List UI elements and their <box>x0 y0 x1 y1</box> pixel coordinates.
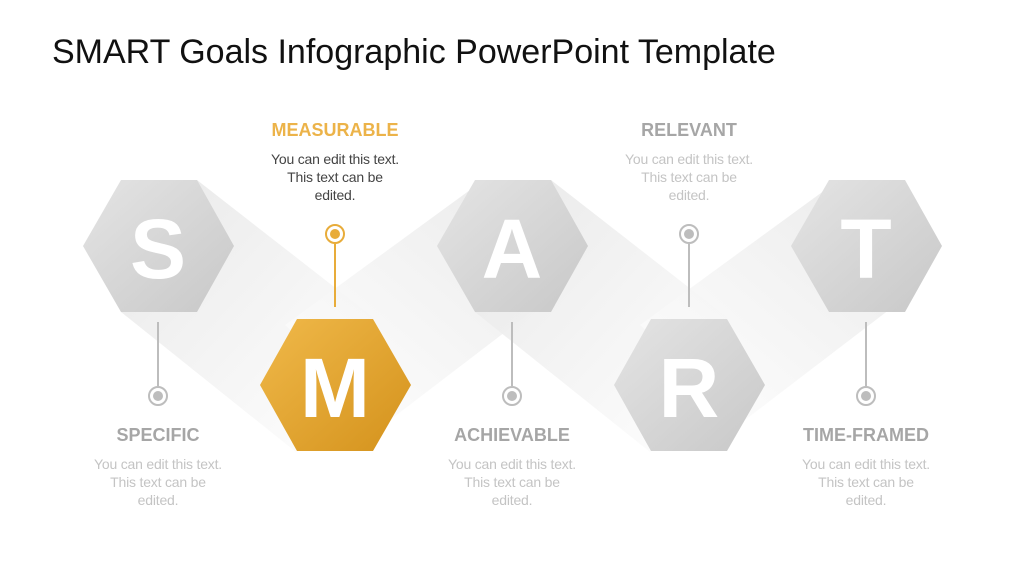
hexagon: T <box>791 180 942 312</box>
hexagon: S: S <box>130 202 186 296</box>
text block: specific: SPECIFIC <box>116 425 200 445</box>
text block: relevant: This text can be <box>641 169 737 185</box>
title: SMART Goals Infographic PowerPoint Template <box>52 33 776 71</box>
pin: S <box>149 322 167 405</box>
hexagon: R <box>614 319 765 451</box>
text block: relevant: You can edit this text. <box>625 151 753 167</box>
text block: measurable: This text can be <box>287 169 383 185</box>
hexagon: S <box>83 180 234 312</box>
hexagon: A <box>437 180 588 312</box>
text block: achievable: ACHIEVABLE <box>454 425 570 445</box>
text block: achievable: This text can be <box>464 474 560 490</box>
pin: M <box>326 225 344 307</box>
text block: time-framed: TIME-FRAMED <box>803 425 929 445</box>
text block: time-framed: This text can be <box>818 474 914 490</box>
text block: specific: This text can be <box>110 474 206 490</box>
text block: measurable: MEASURABLE <box>271 120 398 140</box>
text block: specific: You can edit this text. <box>94 456 222 472</box>
text block: achievable: edited. <box>492 492 532 508</box>
hexagon: R: R <box>659 341 719 435</box>
pin: A <box>503 322 521 405</box>
text block: measurable <box>271 120 399 203</box>
text block: measurable: edited. <box>315 187 355 203</box>
text block: specific: edited. <box>138 492 178 508</box>
hexagon: M <box>260 319 411 451</box>
text block: specific <box>94 425 222 508</box>
pin: T <box>857 322 875 405</box>
hexagon: T: T <box>840 202 892 296</box>
hexagon: M: M <box>300 341 370 435</box>
pin: R <box>680 225 698 307</box>
text block: relevant <box>625 120 753 203</box>
text block: time-framed: edited. <box>846 492 886 508</box>
text block: achievable <box>448 425 576 508</box>
text block: relevant: edited. <box>669 187 709 203</box>
text block: time-framed: You can edit this text. <box>802 456 930 472</box>
ribbon: R to T <box>640 190 915 420</box>
text block: achievable: You can edit this text. <box>448 456 576 472</box>
ribbon: M to A <box>285 190 560 420</box>
hexagon: A: A <box>482 202 542 296</box>
text block: time-framed <box>802 425 930 508</box>
text block: relevant: RELEVANT <box>641 120 737 140</box>
text block: measurable: You can edit this text. <box>271 151 399 167</box>
ribbon: S to M <box>121 180 374 452</box>
ribbon: A to R <box>475 180 728 452</box>
